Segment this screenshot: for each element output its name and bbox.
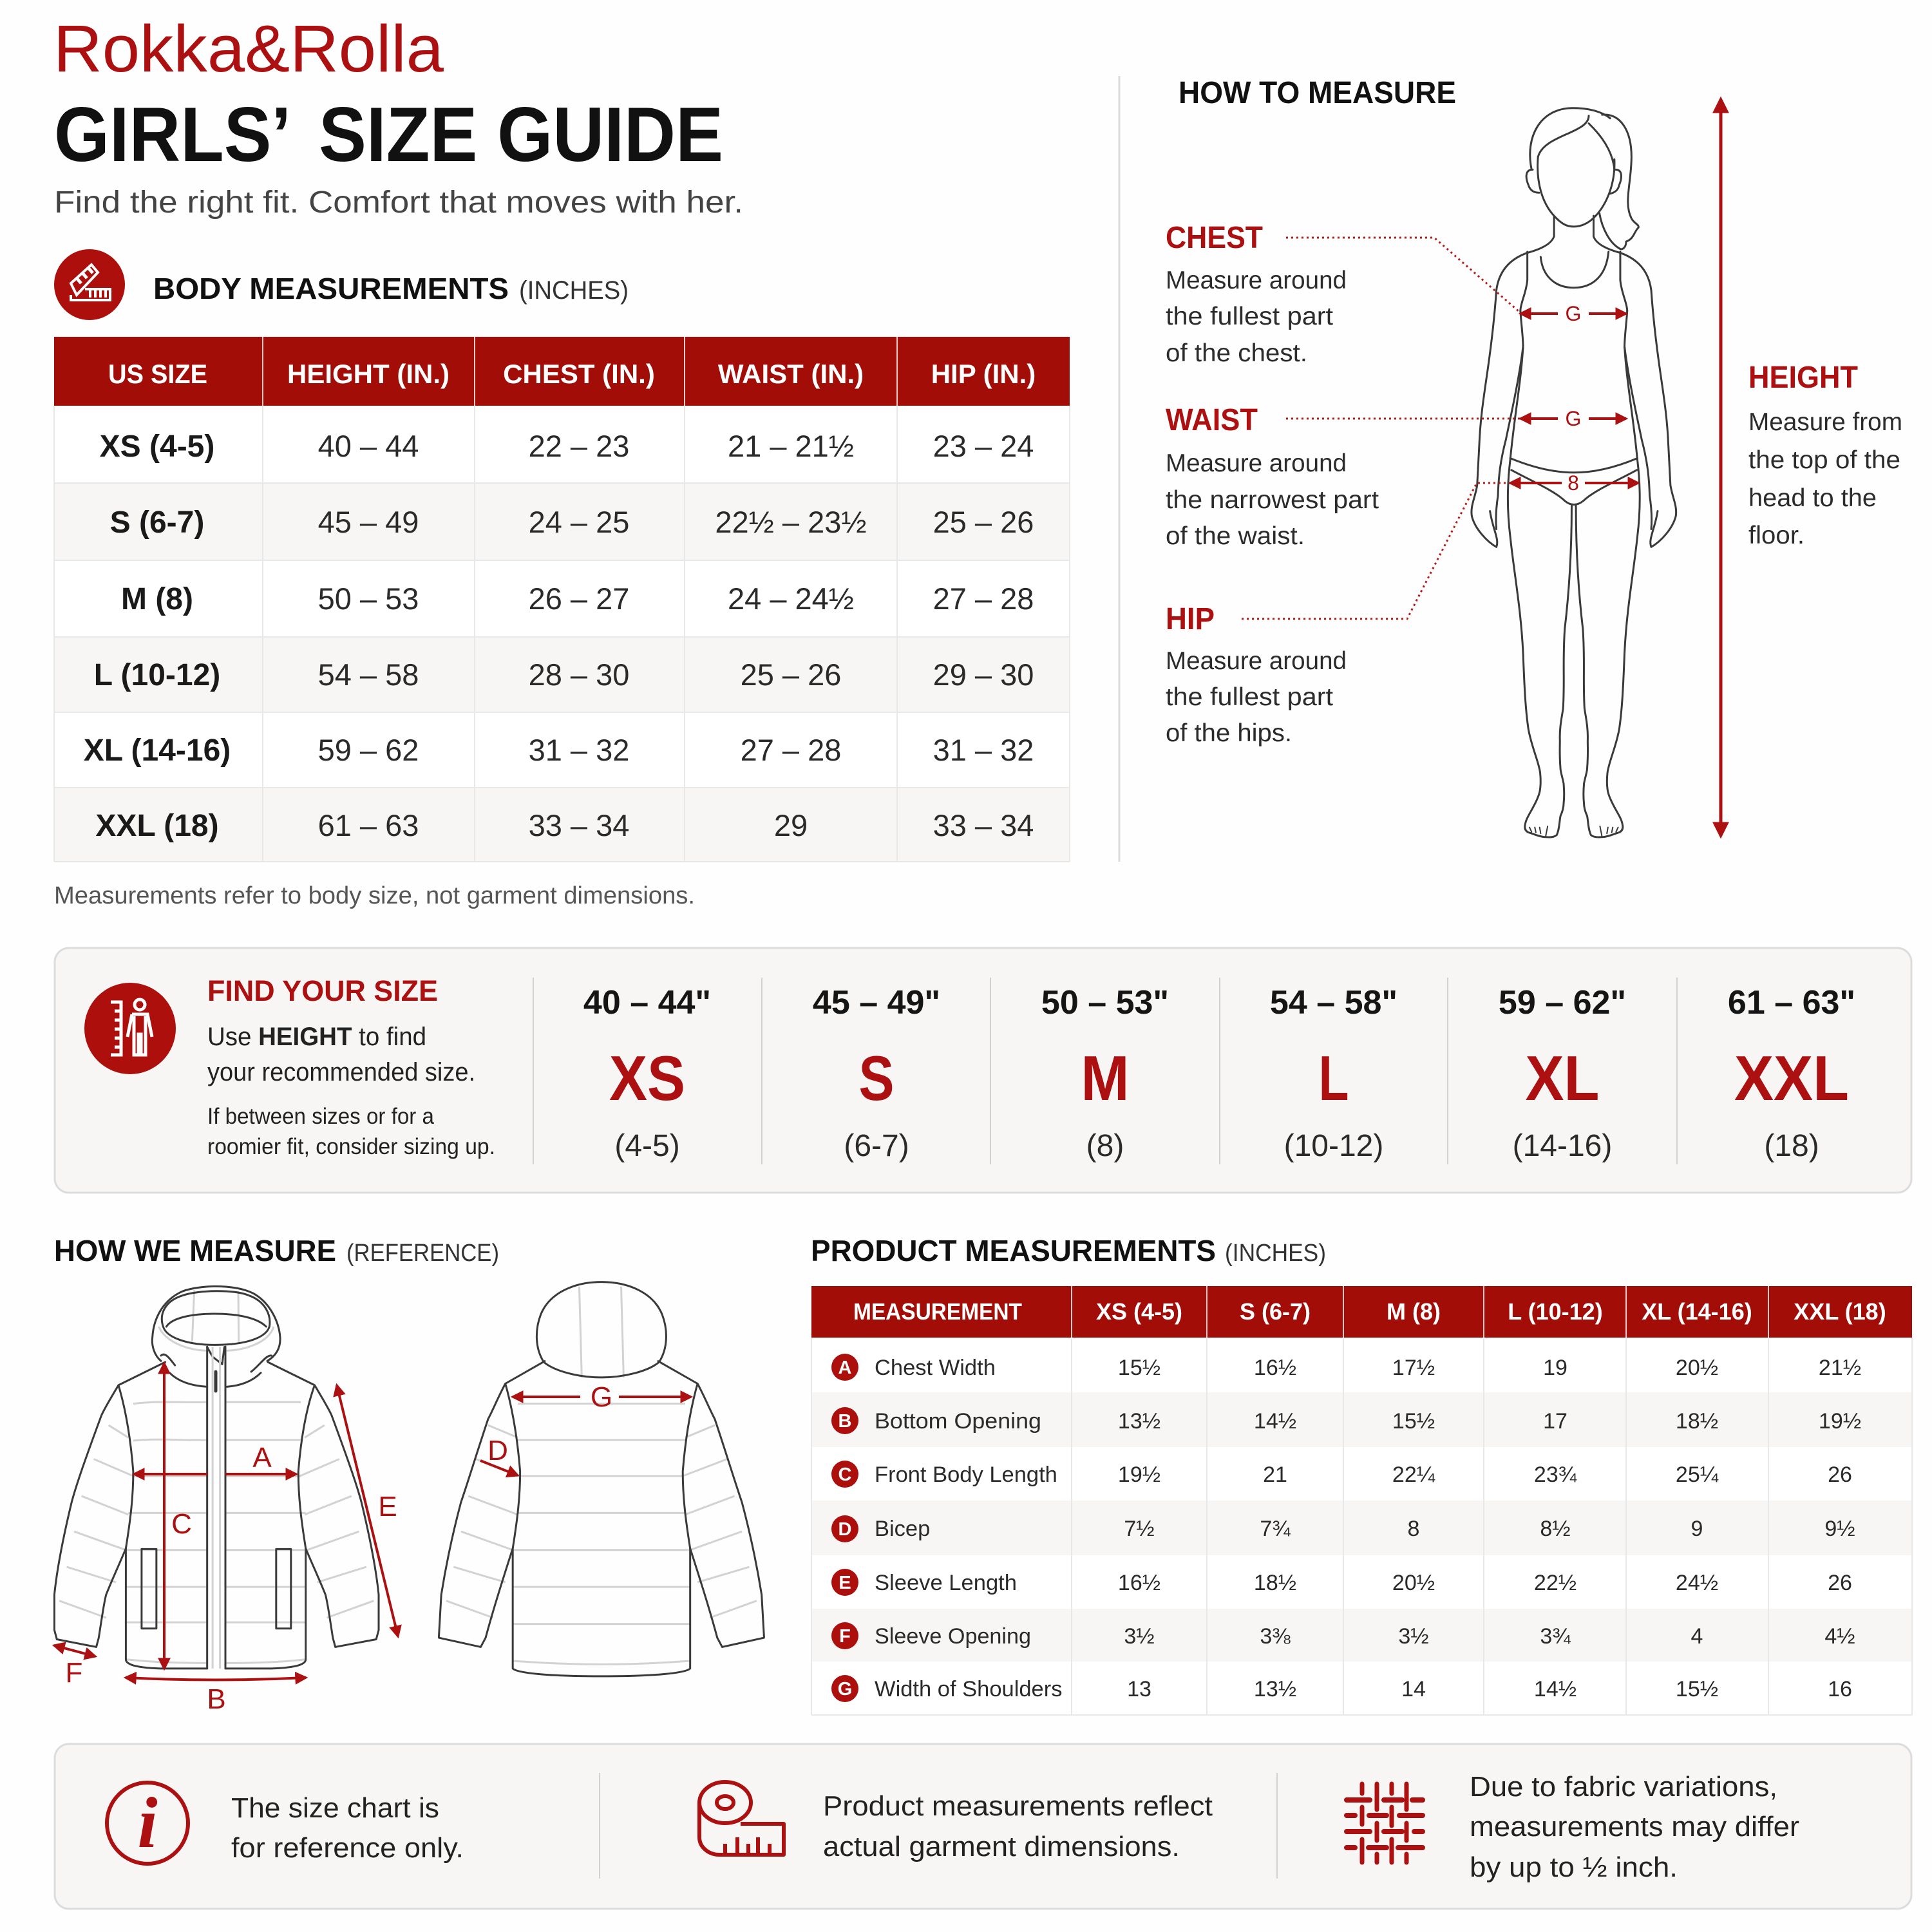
table header: WAIST (IN.) — [718, 359, 864, 389]
table rows: 22 – 23 — [529, 429, 629, 463]
row: bicep: 8½ — [1540, 1517, 1571, 1541]
row: chest width: 20½ — [1676, 1356, 1718, 1380]
arrow: waist: G — [1566, 407, 1581, 430]
table rows: 50 – 53 — [318, 582, 419, 616]
size column: XXL: 61 – 63" — [1728, 984, 1855, 1021]
row: width of shoulders: Width of Shoulders — [875, 1677, 1062, 1701]
size column: XXL: (18) — [1764, 1129, 1819, 1163]
callout: chest — [1166, 221, 1347, 367]
product table header: S (6-7) — [1240, 1298, 1311, 1325]
row: width of shoulders: 14½ — [1534, 1677, 1577, 1701]
brand logo: Rokka&Rolla — [53, 12, 444, 86]
row: sleeve opening: Sleeve Opening — [875, 1624, 1031, 1649]
table rows: XS (4-5) — [100, 430, 214, 464]
callout: hip — [1166, 602, 1347, 747]
row: front body length — [831, 1461, 1852, 1488]
product table header — [811, 1286, 1912, 1338]
table rows: L (10-12) — [94, 658, 220, 692]
callout: waist: the narrowest part — [1166, 486, 1379, 514]
table rows: 45 – 49 — [318, 505, 419, 539]
row: bottom opening: 19½ — [1819, 1409, 1861, 1434]
row: sleeve opening: 3½ — [1398, 1624, 1429, 1649]
row: bottom opening: 18½ — [1676, 1409, 1718, 1434]
heading: product measurements: (INCHES) — [1225, 1240, 1326, 1267]
row: front body length: Front Body Length — [875, 1463, 1057, 1487]
callout: height: the top of the — [1748, 446, 1900, 474]
note: garment dimensions: Product measurements reflect — [823, 1790, 1213, 1822]
row: bottom opening: 14½ — [1254, 1409, 1296, 1434]
measure labels on front — [134, 1473, 207, 1475]
row: front body length: C — [838, 1464, 852, 1485]
size column: S: S — [859, 1043, 894, 1113]
size column: XL: 59 – 62" — [1499, 984, 1626, 1021]
row: chest width: 19 — [1543, 1356, 1567, 1380]
size column: M — [1041, 984, 1169, 1163]
note: garment dimensions — [823, 1790, 1213, 1862]
row: front body length: 22¼ — [1392, 1463, 1435, 1487]
panel: notes — [55, 1744, 1911, 1909]
row: bottom opening: 13½ — [1118, 1409, 1160, 1434]
row: width of shoulders: G — [838, 1679, 852, 1700]
arrow: chest: G — [1566, 302, 1581, 325]
find your size text: FIND YOUR SIZE — [207, 974, 438, 1007]
product table header: MEASUREMENT — [853, 1298, 1022, 1325]
heading: body measurements: BODY MEASUREMENTS — [153, 272, 509, 305]
row: front body length: 19½ — [1118, 1463, 1160, 1487]
find your size text: Use HEIGHT to find — [207, 1023, 426, 1051]
arrow: height — [1719, 99, 1722, 836]
size column: XS: 40 – 44" — [583, 984, 711, 1021]
row: bottom opening: B — [838, 1411, 851, 1432]
row: sleeve length: E — [838, 1573, 851, 1593]
table rows: 29 – 30 — [933, 658, 1034, 692]
note: fabric variation — [1470, 1771, 1799, 1883]
table rows: 29 — [774, 808, 808, 842]
size column: XL — [1499, 984, 1626, 1163]
size column: L: (10-12) — [1284, 1129, 1383, 1163]
size column: S: 45 – 49" — [813, 984, 940, 1021]
callout: waist: Measure around — [1166, 450, 1347, 477]
table rows: 40 – 44 — [318, 429, 419, 463]
row: bicep: D — [838, 1519, 851, 1540]
row: sleeve length — [831, 1569, 1852, 1596]
table rows: 25 – 26 — [933, 505, 1034, 539]
callout: chest: Measure around — [1166, 267, 1347, 294]
table rows: 26 – 27 — [529, 582, 629, 616]
table rows: 33 – 34 — [933, 808, 1034, 842]
row: sleeve opening: 3½ — [1124, 1624, 1155, 1649]
table rows: 61 – 63 — [318, 808, 419, 842]
table: body measurements — [54, 337, 1070, 862]
table rows: 28 – 30 — [529, 658, 629, 692]
leader lines — [1242, 238, 1522, 619]
callout: hip: the fullest part — [1166, 683, 1333, 711]
icon: info: i — [137, 1783, 158, 1863]
title: GIRLS’ — [54, 91, 291, 178]
diagram: jacket back: D — [488, 1435, 508, 1466]
heading: how we measure: (REFERENCE) — [346, 1240, 499, 1267]
table rows: S (6-7) — [110, 506, 204, 540]
callout: height: floor. — [1748, 522, 1804, 549]
size column: M: 50 – 53" — [1041, 984, 1169, 1021]
size column: S: (6-7) — [844, 1129, 909, 1163]
table rows — [84, 429, 1034, 843]
find your size text — [207, 974, 495, 1159]
size column: XL: XL — [1525, 1043, 1600, 1113]
row: chest width: 17½ — [1392, 1356, 1435, 1380]
row: bicep: 7¾ — [1260, 1517, 1291, 1541]
icon: tape measure — [699, 1782, 784, 1855]
arrow: hip: 8 — [1567, 471, 1579, 495]
find your size text: If between sizes or for a — [207, 1104, 434, 1129]
row: bicep: 8 — [1408, 1517, 1419, 1541]
row: width of shoulders: 13½ — [1254, 1677, 1296, 1701]
measure labels on back — [513, 1396, 580, 1398]
row: sleeve length: 16½ — [1118, 1571, 1160, 1595]
title — [54, 91, 723, 178]
title: SIZE GUIDE — [319, 91, 723, 178]
table: product measurements — [811, 1286, 1912, 1715]
size column: S — [813, 984, 940, 1163]
row: bicep: Bicep — [875, 1517, 930, 1541]
table rows: 27 – 28 — [741, 733, 841, 767]
row: bicep: 7½ — [1124, 1517, 1155, 1541]
product table header: M (8) — [1387, 1298, 1441, 1325]
callout: waist: of the waist. — [1166, 522, 1305, 550]
note: fabric variation: Due to fabric variations, — [1470, 1771, 1777, 1803]
icon: info — [107, 1783, 188, 1864]
table rows: M (8) — [121, 582, 193, 616]
callout: chest: CHEST — [1166, 221, 1263, 255]
size column: L — [1270, 984, 1397, 1163]
find your size text: your recommended size. — [207, 1058, 475, 1086]
size column: L: 54 – 58" — [1270, 984, 1397, 1021]
row: bottom opening: 17 — [1543, 1409, 1567, 1434]
panel: find your size — [55, 948, 1911, 1193]
row: sleeve opening: 4 — [1691, 1624, 1703, 1649]
row: chest width: A — [838, 1358, 852, 1378]
size column: XS: (4-5) — [614, 1129, 680, 1163]
diagram: jacket back: G — [591, 1381, 612, 1413]
size column: XS: XS — [609, 1043, 685, 1113]
subtitle: Find the right fit. Comfort that moves with her. — [54, 185, 743, 220]
callout: hip: of the hips. — [1166, 719, 1292, 747]
callout: hip: HIP — [1166, 602, 1215, 636]
row: width of shoulders: 15½ — [1676, 1677, 1718, 1701]
table rows: 24 – 24½ — [728, 582, 854, 616]
row: front body length: 23¾ — [1534, 1463, 1577, 1487]
row: width of shoulders: 13 — [1127, 1677, 1151, 1701]
diagram: jacket front: C — [171, 1508, 192, 1540]
heading: how we measure: HOW WE MEASURE — [54, 1234, 336, 1267]
note: reference only — [231, 1792, 464, 1864]
note: reference only: The size chart is — [231, 1792, 439, 1824]
product table header: L (10-12) — [1508, 1298, 1603, 1325]
table header — [54, 337, 1070, 406]
footnote: Measurements refer to body size, not garment dimensions. — [54, 882, 695, 909]
row: front body length: 21 — [1263, 1463, 1287, 1487]
note: fabric variation: measurements may differ — [1470, 1811, 1799, 1842]
table rows: XXL (18) — [95, 809, 219, 843]
size column: L: L — [1319, 1043, 1349, 1113]
icon: ruler badge — [54, 249, 125, 320]
row: chest width — [831, 1354, 1861, 1381]
size column: XXL: XXL — [1734, 1043, 1849, 1113]
diagram: jacket front: A — [252, 1442, 272, 1473]
size column: XL: (14-16) — [1513, 1129, 1612, 1163]
row: sleeve opening: F — [839, 1626, 851, 1647]
size column: XS — [583, 984, 711, 1163]
row: width of shoulders: 14 — [1401, 1677, 1426, 1701]
row: sleeve length: 24½ — [1676, 1571, 1718, 1595]
row: sleeve length: 26 — [1828, 1571, 1852, 1595]
row: bicep — [831, 1515, 1855, 1542]
table rows: 21 – 21½ — [728, 429, 854, 463]
table rows: 23 – 24 — [933, 429, 1034, 463]
callout: waist: WAIST — [1166, 403, 1258, 437]
heading: how to measure: HOW TO MEASURE — [1179, 76, 1456, 110]
row: bottom opening: Bottom Opening — [875, 1409, 1041, 1434]
heading: body measurements: (INCHES) — [519, 276, 629, 305]
table rows: 33 – 34 — [529, 808, 629, 842]
note: reference only: for reference only. — [231, 1832, 464, 1864]
row: chest width: Chest Width — [875, 1356, 996, 1380]
table rows: 27 – 28 — [933, 582, 1034, 616]
row: front body length: 26 — [1828, 1463, 1852, 1487]
size column: XXL — [1728, 984, 1855, 1163]
row: sleeve opening: 3⅜ — [1260, 1624, 1291, 1649]
product table header: XL (14-16) — [1642, 1298, 1752, 1325]
product table header: XS (4-5) — [1096, 1298, 1182, 1325]
callout: chest: the fullest part — [1166, 303, 1333, 330]
row: front body length: 25¼ — [1676, 1463, 1719, 1487]
row: chest width: 16½ — [1254, 1356, 1296, 1380]
heading: product measurements: PRODUCT MEASUREMENTS — [811, 1234, 1216, 1267]
row: width of shoulders: 16 — [1828, 1677, 1852, 1701]
table rows: 22½ – 23½ — [715, 505, 867, 539]
callout: chest: of the chest. — [1166, 339, 1307, 367]
callout: hip: Measure around — [1166, 647, 1347, 675]
heading: how we measure — [54, 1234, 499, 1267]
note: fabric variation: by up to ½ inch. — [1470, 1852, 1678, 1883]
diagram: jacket front: B — [207, 1683, 226, 1715]
row: sleeve opening: 4½ — [1824, 1624, 1855, 1649]
row: bicep: 9½ — [1824, 1517, 1855, 1541]
callout: height: Measure from — [1748, 408, 1902, 436]
row: sleeve opening — [831, 1622, 1855, 1649]
size column: M: (8) — [1086, 1129, 1124, 1163]
row: sleeve opening: 3¾ — [1540, 1624, 1571, 1649]
row: sleeve length: Sleeve Length — [875, 1571, 1017, 1595]
row: sleeve length: 20½ — [1392, 1571, 1435, 1595]
table header: US SIZE — [108, 359, 207, 389]
row: chest width: 15½ — [1118, 1356, 1160, 1380]
table rows: 54 – 58 — [318, 658, 419, 692]
table rows: 31 – 32 — [933, 733, 1034, 767]
diagram: jacket front: F — [66, 1657, 82, 1689]
table rows: 31 – 32 — [529, 733, 629, 767]
icon: height ruler and figure — [84, 983, 176, 1074]
find your size text: roomier fit, consider sizing up. — [207, 1134, 495, 1159]
diagram: jacket front — [54, 1286, 398, 1715]
row: bicep: 9 — [1691, 1517, 1703, 1541]
callout: waist — [1166, 403, 1379, 550]
figure: girl outline — [1472, 108, 1676, 837]
table rows: XL (14-16) — [84, 734, 231, 768]
callout: height — [1748, 361, 1902, 549]
row: chest width: 21½ — [1819, 1356, 1861, 1380]
callout: height: head to the — [1748, 484, 1877, 512]
callout: height: HEIGHT — [1748, 361, 1858, 395]
row: bottom opening — [831, 1407, 1861, 1434]
table header: HEIGHT (IN.) — [287, 359, 450, 389]
table header: HIP (IN.) — [931, 359, 1036, 389]
row: bottom opening: 15½ — [1392, 1409, 1435, 1434]
product table header: XXL (18) — [1794, 1298, 1886, 1325]
diagram: jacket front: E — [378, 1491, 397, 1522]
table rows: 59 – 62 — [318, 733, 419, 767]
table rows: 25 – 26 — [741, 658, 841, 692]
diagram: jacket back — [439, 1282, 764, 1676]
table rows: 24 – 25 — [529, 505, 629, 539]
size column: M: M — [1081, 1043, 1130, 1113]
icon: fabric weave — [1347, 1784, 1423, 1862]
row: width of shoulders — [831, 1675, 1852, 1702]
note: garment dimensions: actual garment dimensions. — [823, 1831, 1180, 1862]
table header: CHEST (IN.) — [503, 359, 655, 389]
row: sleeve length: 18½ — [1254, 1571, 1296, 1595]
row: sleeve length: 22½ — [1534, 1571, 1577, 1595]
